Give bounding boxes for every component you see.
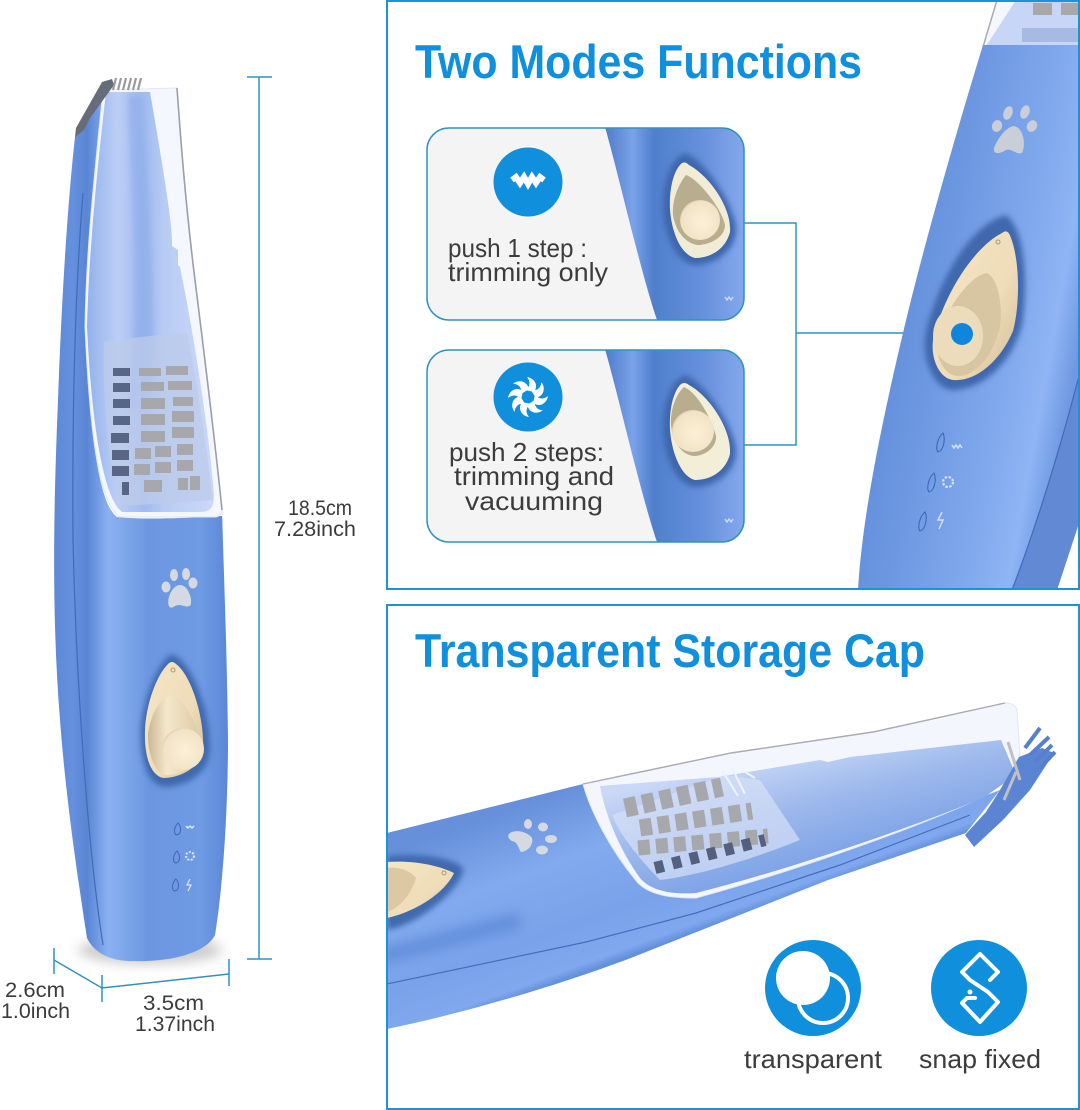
width label: 3.5cm (143, 992, 204, 1015)
close-up clipper (858, 0, 1080, 590)
card text: vacuuming (465, 486, 603, 516)
height label (274, 497, 356, 541)
callout dot (951, 323, 973, 345)
panel frame (387, 1, 1079, 589)
comb teeth (113, 78, 141, 90)
blade (1004, 742, 1020, 800)
icon: paw (990, 104, 1039, 153)
connector lines (744, 223, 962, 445)
dimension: depth and width (1, 948, 229, 1036)
width label: 1.37inch (135, 1013, 215, 1036)
icon: fan (494, 362, 562, 432)
panel: two modes functions (387, 0, 1080, 590)
icon: trim wave (494, 148, 562, 216)
body (387, 784, 1000, 1029)
height label: 7.28inch (274, 518, 356, 541)
product: full clipper with dimensions (54, 78, 228, 964)
icon: snap arrows (931, 940, 1027, 1036)
slider button (925, 215, 1025, 390)
icon: overlapping circles (765, 940, 861, 1036)
panel frame (387, 605, 1079, 1109)
depth label: 2.6cm (5, 979, 65, 1002)
card border (427, 128, 744, 320)
cap upper edge (583, 703, 1005, 784)
base shadow (78, 936, 222, 964)
feature: transparent (744, 940, 883, 1074)
card text: trimming and (454, 461, 614, 491)
mode card: trimming only (427, 127, 744, 320)
cap (583, 703, 1020, 898)
card text: push 2 steps: (449, 437, 604, 467)
indicator lights (919, 433, 962, 531)
body shading band (380, 920, 520, 957)
card text: push 1 step : (448, 233, 587, 263)
heading: Two Modes Functions (415, 35, 862, 88)
seam (1014, 383, 1078, 588)
icon: paw (508, 819, 557, 854)
clipper body (54, 93, 228, 961)
dimension: height (247, 77, 356, 959)
card text (449, 437, 614, 516)
seam (387, 815, 970, 984)
card text (448, 233, 608, 287)
cap clip (724, 772, 756, 796)
inner core (600, 740, 1016, 893)
mode card: trimming and vacuuming (427, 349, 744, 542)
cap right edge (177, 88, 222, 510)
slider button (387, 855, 463, 930)
body seam (73, 193, 103, 945)
card product crop (605, 349, 744, 542)
blade guard (75, 79, 114, 137)
body (858, 45, 1080, 590)
heading: Transparent Storage Cap (415, 624, 925, 677)
filter screen (104, 333, 213, 506)
feature: snap fixed (919, 940, 1041, 1074)
transparent cap (85, 88, 222, 517)
clipper horizontal view (380, 703, 1055, 1029)
card border (427, 350, 744, 542)
core stripe (128, 95, 153, 410)
feature label: snap fixed (919, 1044, 1041, 1074)
depth label (1, 979, 70, 1023)
comb teeth (1025, 728, 1055, 768)
filter screen (612, 775, 800, 880)
inner core (87, 92, 214, 512)
slider button (141, 654, 210, 787)
panel: transparent storage cap (380, 605, 1079, 1109)
card product crop (605, 127, 744, 320)
width label (135, 992, 215, 1036)
card background (427, 350, 744, 542)
indicator lights (172, 823, 194, 891)
depth label: 1.0inch (1, 1000, 70, 1023)
blade guard (965, 748, 1054, 847)
height label: 18.5cm (288, 497, 352, 520)
icon: paw (162, 568, 198, 608)
card background (427, 128, 744, 320)
feature label: transparent (744, 1044, 883, 1074)
card text: trimming only (448, 257, 608, 287)
cap remnant (984, 2, 1014, 45)
